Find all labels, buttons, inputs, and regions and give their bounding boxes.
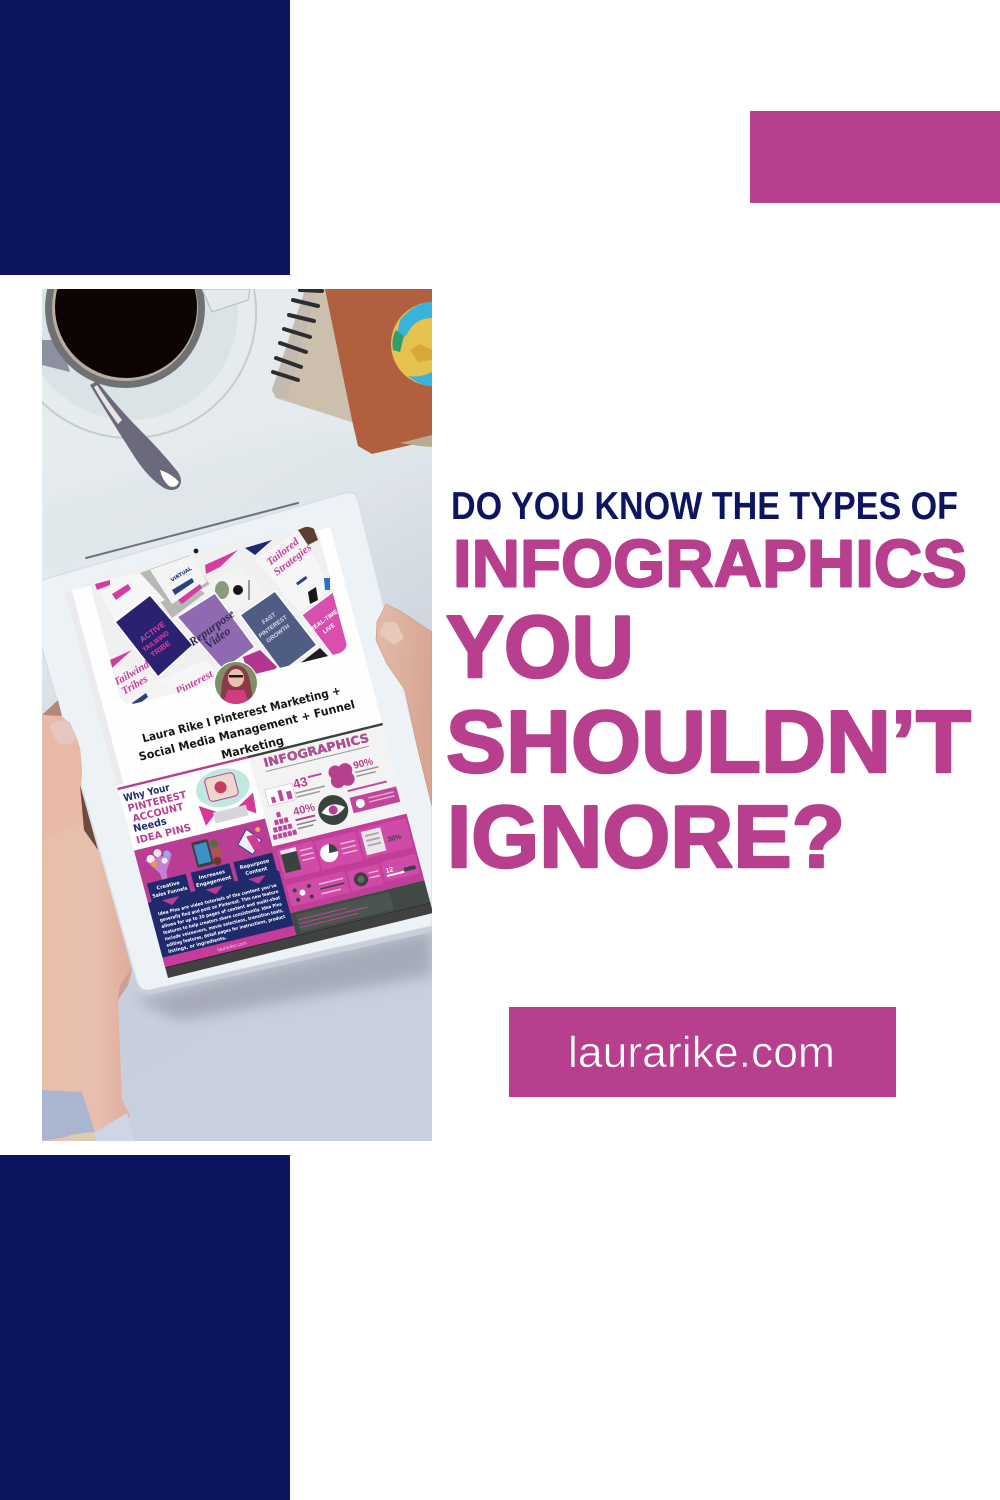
card: clock [346, 864, 384, 892]
tablet screen [65, 527, 433, 978]
card: twelve stat: 12 [385, 866, 394, 875]
tab: increases engagement [190, 863, 234, 894]
pin collage [42, 520, 382, 730]
website button [509, 1007, 896, 1097]
spoon [90, 381, 181, 490]
leather notebook [325, 289, 432, 454]
pin: tailored strategies [255, 524, 332, 612]
avatar: profile photo [214, 661, 258, 705]
pin: lips logo [205, 550, 238, 574]
headline shouldn't: SHOULDN’T [446, 692, 971, 791]
stat: brain 90 percent: 90% [352, 756, 375, 772]
headline [446, 485, 971, 886]
pin: navy tailwind tribe: TAILWIND [142, 630, 171, 654]
left hand and wrist [42, 786, 132, 1141]
headline ignore: IGNORE? [447, 787, 845, 886]
divider line [117, 723, 383, 790]
icon: eye [318, 795, 348, 825]
pink accent block top right [750, 111, 1000, 203]
tab: creative sales funnels [146, 874, 191, 905]
card: bar stat [277, 841, 320, 880]
left panel: pink section [134, 818, 296, 967]
left panel: idea pins heading: Needs [132, 816, 168, 835]
stat: brain 90 percent [328, 758, 379, 788]
pin: fast pinterest growth [240, 591, 317, 672]
icon: pinterest illustration [196, 768, 256, 826]
pin: fast pinterest growth: FAST [261, 612, 278, 626]
pin: pinterest powers [160, 660, 225, 700]
footer strips [162, 902, 432, 978]
left panel: idea pins heading: IDEA PINS [135, 823, 192, 847]
headline infographics: INFOGRAPHICS [453, 526, 967, 602]
photo panel: tablet on desk [42, 289, 432, 1141]
profile name: Marketing [220, 733, 285, 762]
idea pins paragraph: generally find and post on Pinterest. This new feature [159, 889, 279, 924]
pin: pinterest tribes [112, 658, 190, 710]
tablet camera [194, 549, 198, 553]
tab: creative sales funnels: Sales Funnels [152, 885, 188, 900]
pin: magenta lower [243, 650, 277, 682]
pin: fast pinterest growth: PINTEREST [258, 615, 289, 640]
left hand thumb [42, 700, 98, 850]
profile name: Laura Rike I Pinterest Marketing + [141, 683, 342, 745]
stat: 43 percent with chart [264, 772, 325, 806]
pin: real-time webinar [302, 592, 350, 660]
tablet shadow [135, 930, 432, 1020]
idea pins paragraph [158, 882, 288, 955]
website button: laurarike.com [568, 1028, 835, 1077]
left panel: idea pins heading [122, 785, 190, 844]
pin: fast pinterest growth: GROWTH [266, 624, 291, 645]
right panel: infographics heading: INFOGRAPHICS [262, 731, 370, 770]
right hand thumb [376, 604, 432, 806]
footer url strip: laurarike.com [217, 940, 247, 953]
pin: plant and coffee photo [200, 565, 268, 612]
idea pins paragraph: editing features, detail pages for instructions, product [166, 914, 287, 949]
idea pins paragraph: include voiceovers, movie selections, transition tools, [164, 908, 284, 943]
pin: virtual event photo [140, 555, 212, 618]
spiral notebook [272, 289, 358, 424]
pin: navy tailwind tribe: TRIBE [149, 639, 172, 659]
tablet body [24, 492, 432, 994]
card: document: 30% [387, 833, 403, 844]
card: pie chart [315, 831, 363, 870]
pin: pinterest powers: Pinterest [174, 668, 216, 698]
pin: real-time webinar: LIVE [322, 623, 337, 636]
right panel: infographics heading [249, 726, 407, 846]
navy text panel [148, 871, 294, 958]
right panel: dark footer [290, 880, 430, 935]
navy sidebar [0, 0, 290, 1500]
icon: clipboard [237, 827, 262, 856]
card: twelve stat [380, 854, 420, 882]
profile name: Social Media Management + Funnel [137, 697, 356, 764]
stat: 43 percent with chart: 43 [291, 774, 309, 792]
pin: tailored strategies: Tailored [264, 536, 302, 568]
saucer [42, 289, 257, 439]
idea pins paragraph: features to help creators share consistently. Idea Pins [163, 901, 283, 936]
left panel: idea pins heading: Why Your [122, 783, 171, 804]
card: network [286, 871, 350, 907]
right panel: pink section with cards [273, 814, 424, 913]
stat: pyramid 40 percent: 40% [292, 801, 317, 818]
pin: pinterest tribes: Tribes [120, 673, 150, 698]
pin: repurpose video: Repurpose [185, 606, 238, 649]
globe [391, 302, 432, 386]
idea pins paragraph: Idea Pins are video tutorials of the content you've [158, 883, 278, 917]
tab: increases engagement: Engagement [196, 875, 233, 889]
left panel: idea pins heading: PINTEREST [127, 790, 188, 815]
pin: dark laptop [298, 648, 330, 668]
tablet top slot [86, 503, 298, 558]
tab: repurpose content [233, 852, 277, 884]
idea pins paragraph: listings, or ingredients. [168, 935, 228, 955]
coffee cup [42, 289, 250, 388]
pin: navy tailwind tribe [115, 595, 193, 677]
pin: real-time webinar: REAL-TIME [309, 609, 339, 633]
icon: phone [191, 839, 222, 868]
pin: navy corner [245, 540, 272, 555]
callout: pink stat box [348, 779, 400, 813]
pin: pink swoosh [110, 650, 132, 668]
pin: virtual event photo: VIRTUAL [170, 566, 194, 584]
pin: pinterest tribes: Tailwind [112, 658, 152, 689]
tab: increases engagement: Increases [198, 869, 226, 881]
pin: navy tailwind tribe: ACTIVE [138, 619, 168, 644]
tab: creative sales funnels: Creative [156, 880, 181, 892]
pin: with pinterest [95, 573, 165, 622]
pin: repurpose video: Video [202, 624, 233, 652]
pin: tailored strategies: Strategies [271, 541, 314, 578]
pin: repurpose video [177, 593, 255, 670]
headline you: YOU [446, 597, 634, 696]
stat: pyramid 40 percent [272, 803, 316, 840]
idea pins paragraph: allows for up to 20 pages of content and multi-shot [161, 895, 282, 930]
tab: repurpose content: Content [245, 866, 269, 877]
left panel: idea pins heading: ACCOUNT [132, 802, 185, 825]
tab: repurpose content: Repurpose [239, 858, 271, 871]
icon: funnel [145, 849, 172, 880]
card: document [357, 818, 413, 859]
